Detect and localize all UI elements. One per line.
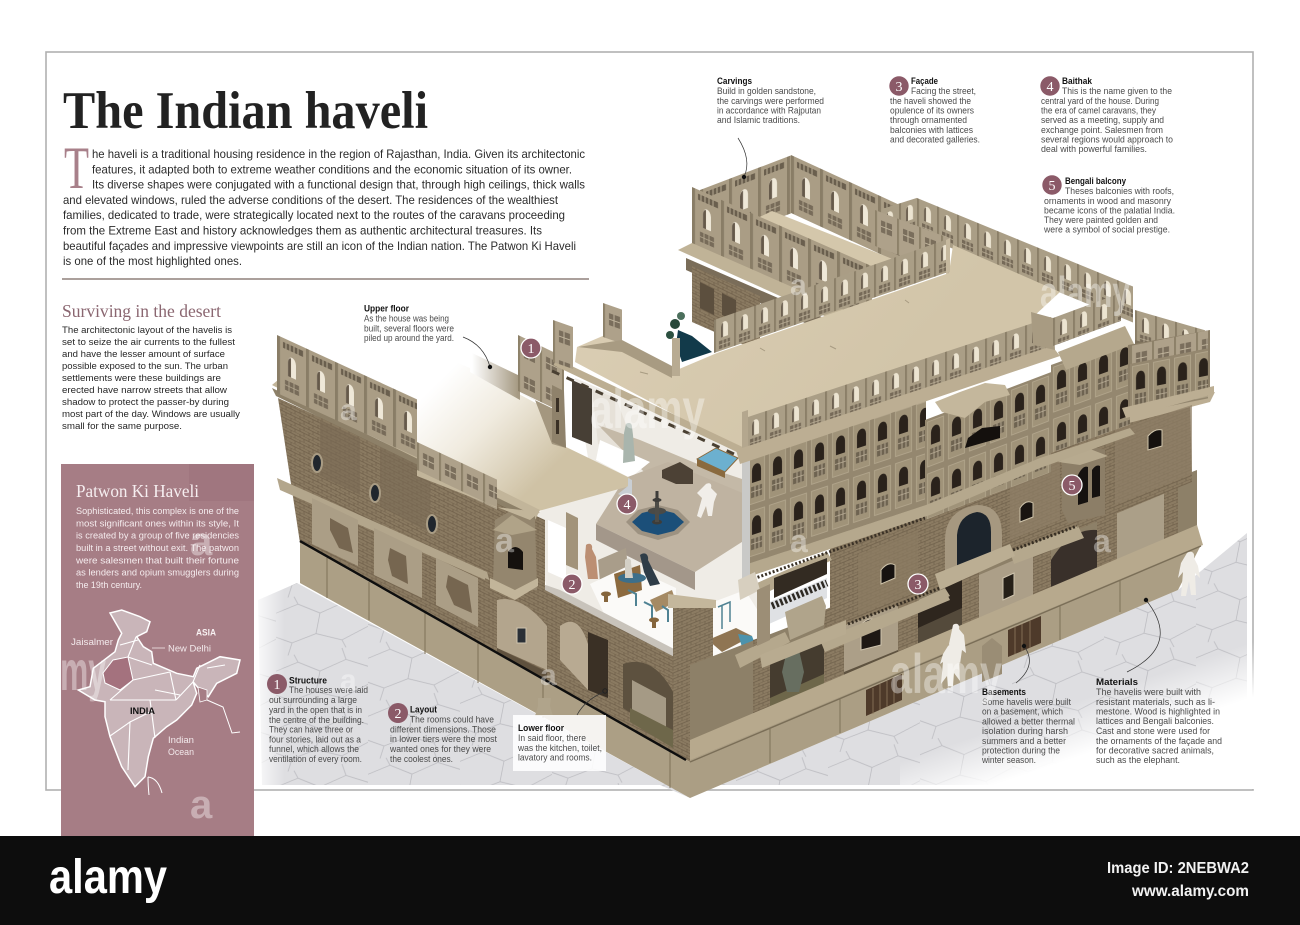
callout: Layout: in lower tiers were the most [390,734,498,744]
lower carved panels [312,498,478,627]
slab under left roof [618,478,632,500]
callout: Façade: the haveli showed the [890,96,971,106]
parapet pier with number 1 [518,335,566,448]
interior: courtyard and rooms [530,378,760,676]
callout: Façade: and decorated galleries. [890,134,980,144]
section: surviving in the desert: settlements were these buildings are [62,373,221,384]
callout: Lower floor [513,689,607,771]
panel text: were salesmen that built their fortune [75,555,239,566]
markers: numbered circles on the building: 3 [914,578,922,593]
watermark overlays: a [190,520,213,564]
callout: Structure: They can have three or [269,724,353,734]
callout: Bengali balcony: ornaments in wood and masonry [1044,196,1172,206]
middle carved storey [735,392,1215,668]
main parapet [745,317,1051,452]
map labels: Jaisalmer [71,637,113,648]
vents [866,674,902,716]
callout: Upper floor: built, several floors were [364,323,454,333]
map of India: ASIA [196,628,216,639]
stock photo footer band: www.alamy.com [1131,883,1249,900]
grand arch [945,505,1002,576]
callout: Structure: yard in the open that is in [269,705,362,715]
callout: Baithak: served as a meeting, supply and [1041,115,1164,125]
callout: Baithak: Baithak [1062,76,1092,86]
main roof [575,245,1060,452]
pavement: cracked ground [252,533,1258,798]
callout: Basements: winter season. [981,755,1036,765]
callout: Structure [267,674,368,764]
title: The Indian haveli [63,82,428,140]
ground storey arches and walls [770,637,824,712]
callout: Bengali balcony: became icons of the palatial India. [1044,206,1175,216]
right room floor [703,590,760,668]
upper left roof [415,345,630,512]
tree and pool [666,312,712,362]
callout: Layout [388,703,498,764]
callout: Upper floor [364,304,492,369]
callout: Bengali balcony [1042,175,1175,234]
callout: Basements [981,644,1075,765]
door canopy [918,588,950,608]
lower arcade [485,578,673,754]
callout: Lower floor: In said floor, there [518,733,586,743]
main right facade [690,470,1197,752]
callout: Basements: on a basement, which [982,706,1063,716]
callout: Carvings [717,76,824,179]
bay window [490,510,538,600]
tower right [1122,330,1214,418]
watermark overlays: alamy [590,377,705,440]
callout: Materials: resistant materials, such as li- [1096,697,1215,707]
callout: Structure: four stories, laid out as a [269,734,361,744]
balcony 5 [1058,445,1108,523]
callout: Lower floor: Lower floor [518,723,565,733]
panel text: built in a street without exit. The patwon [76,543,239,554]
callout: Lower floor: lavatory and rooms. [518,752,592,762]
watermark overlays: a [340,664,357,697]
markers: numbered circles on the building: 5 [1068,479,1076,494]
watermark overlays: a [340,394,357,427]
callout: Layout: Layout [410,704,437,714]
markers: numbered circles on the building: 4 [624,498,630,513]
markers: numbered circles on the building [521,338,1082,594]
stock photo footer band: Image ID: 2NEBWA2 [1107,860,1249,877]
urn and post [982,638,1002,682]
callout: Carvings: and Islamic traditions. [717,115,800,125]
callout: Façade: Facing the street, [911,86,976,96]
callout: Carvings: the carvings were performed [717,96,824,106]
cut face strip [742,452,750,582]
map of India: INDIA [130,706,155,717]
callout: Carvings: in accordance with Rajputan [717,106,821,116]
low parapet fading [470,352,520,400]
terrace pier [757,584,770,646]
callout: Materials: the ornaments of the façade and [1096,736,1222,746]
callout: Façade: opulence of its owners [890,106,975,116]
callout: Materials: for decorative sacred animals, [1096,746,1214,756]
section: surviving in the desert: erected have narrow streets that allow [62,385,227,396]
callout: Façade [889,76,980,144]
callout: Basements: isolation during harsh [982,726,1068,736]
intro text block: families, dedicated to trade, were strategically located next to the routes of the caravans proceeding [63,208,565,222]
callout: Structure: ventilation of every room. [269,754,362,764]
intro text block: from the Extreme East and history acknowledges them as authentic architectural treasures. Its [63,224,542,238]
carved panels right [1010,460,1060,540]
back parapets [875,198,1205,360]
watermark overlays: a [1093,523,1111,559]
intro text block: Its diverse shapes were conjugated with a functional design that, through high ceilings, thick walls [92,178,585,192]
Rajasthan highlight [103,657,133,690]
map of India: Ocean [168,747,194,758]
intro text block: is one of the most highlighted ones. [63,254,242,268]
panel text: most significant ones within its style, It [76,518,239,529]
pier and figure [566,512,578,570]
intro text block: he haveli is a traditional housing residence in the region of Rajasthan, India. Given its architectonic [92,147,585,161]
low parapet [417,442,497,510]
map of India: Indian [168,735,194,746]
callout: Baithak: the era of camel caravans, they [1041,106,1157,116]
fountain [626,491,690,540]
cornice under parapet [736,346,1060,464]
watermark overlays: alamy [890,642,1002,705]
callout: Upper floor: As the house was being [364,314,449,324]
mid cornice [277,478,490,582]
panel heading: Patwon Ki Haveli [76,481,199,501]
callout: Basements: Some havelis were built [982,697,1072,707]
map of India: New Delhi [168,644,211,655]
section: surviving in the desert: shadow to protect the passer-by during [62,397,229,408]
callout: Layout: different dimensions. Those [390,724,496,734]
watermark overlays: a [540,659,557,692]
panel text: the 19th century. [76,580,142,591]
callout: Façade: through ornamented [890,115,967,125]
callout: Façade: balconies with lattices [890,125,974,135]
balustrade of terrace [760,578,827,628]
callout: Bengali balcony: Theses balconies with roofs, [1065,186,1174,196]
callout: Materials: Materials [1096,677,1138,687]
small windows [312,454,437,533]
watermark overlays: a [190,783,213,827]
callout: Bengali balcony: 5 [1048,179,1056,194]
callout: Bengali balcony: Bengali balcony [1065,176,1126,186]
upper storey shading and panels [320,420,430,533]
callout: Baithak: exchange point. Salesmen from [1041,125,1163,135]
watermark overlays: alamy [1040,268,1130,317]
callout: Upper floor: Upper floor [364,304,410,314]
callout: Materials: mestone. Wood is highlighted in [1096,706,1220,716]
foundation left [300,541,690,798]
stub parapets [553,303,680,378]
callout: Layout: 2 [394,707,402,722]
watermark overlays: a [790,523,808,559]
intro text block: beautiful façades and impressive viewpoints are still an icon of the Indian nation. The Patwon Ki Haveli [63,239,576,253]
roof edge beams [555,362,745,452]
foundation right [690,525,1203,798]
bed and dark block [662,462,693,484]
panel text: is created by a group of five residencies [76,531,239,542]
white floor: main room [590,566,676,652]
stock photo footer band: alamy [49,851,167,904]
watermark overlays [60,268,1130,827]
callout: Materials [1096,598,1222,765]
callout: Façade: Façade [911,76,938,86]
callout: Structure: Structure [289,676,327,686]
stub right [1031,312,1055,350]
intro text block [63,135,585,268]
corner piers [673,603,713,742]
callout: Structure: 1 [274,678,280,693]
watermark overlays: my [60,639,106,702]
callout: Structure: funnel, which allows the [269,744,359,754]
drop cap: T [64,135,89,201]
lower storey eaves [757,552,832,596]
section: surviving in the desert: most part of the day. Windows are usually [62,409,240,420]
map of India [71,610,240,795]
callout: Baithak: 4 [1046,80,1054,95]
watermark overlays: a [790,269,807,302]
markers: numbered circles on the building: 2 [568,578,576,593]
callout: Façade: 3 [896,80,902,95]
callout: Lower floor: was the kitchen, toilet, [517,743,602,753]
callout: Basements: allowed a better thermal [982,716,1075,726]
left parapet [277,335,417,457]
stock photo footer band [0,836,1300,925]
panel text: as lenders and opium smugglers during [76,568,239,579]
callout: Structure: out surrounding a large [269,695,357,705]
callout: Structure: the centre of the building. [269,715,364,725]
callout: Carvings: Build in golden sandstone, [717,86,816,96]
callout: Baithak [1040,76,1173,154]
section: surviving in the desert: and have the lesser amount of surface [62,349,225,360]
panel: Patwon Ki Haveli [61,464,254,836]
intro text block: and elevated windows, ruled the adverse conditions of the desert. The residences of the wealthiest [63,193,559,207]
inner parapet [714,240,946,353]
section: surviving in the desert: set to seize the air currents to the fullest [62,337,235,348]
callout: Structure: The houses were laid [289,685,368,695]
statue and white figures [623,423,635,463]
callout: Bengali balcony: were a symbol of social prestige. [1043,224,1170,234]
callout: Basements: summers and a better [982,736,1066,746]
callout: Bengali balcony: They were painted golden and [1044,215,1158,225]
callout: Baithak: central yard of the house. During [1041,96,1159,106]
callout: Baithak: several regions would approach to [1041,134,1173,144]
callout: Layout: wanted ones for they were [389,744,491,754]
bengali roof [935,383,1010,418]
callout: Layout: The rooms could have [410,714,494,724]
callout: Baithak: deal with powerful families. [1041,144,1147,154]
rear block [678,155,906,352]
callout: Materials: lattices and Bengali balconies. [1096,716,1214,726]
callout: Layout: the coolest ones. [390,754,453,764]
left facade [272,380,752,762]
section heading: Surviving in the desert [62,301,221,321]
watermark overlays: a [495,522,515,560]
ground storey base [690,470,1197,752]
callout: Baithak: This is the name given to the [1062,86,1172,96]
callout: Carvings: Carvings [717,76,752,86]
callout: Upper floor: piled up around the yard. [364,333,454,343]
panel text [75,506,239,591]
markers: numbered circles on the building: 1 [528,342,534,357]
illustration: cutaway haveli building [272,155,1215,798]
callout: Materials: The havelis were built with [1096,687,1201,697]
panel text: Sophisticated, this complex is one of the [76,506,239,517]
intro text block: features, it adapted both to extreme weather conditions and the economic situation of its owner. [92,162,572,176]
callout: Materials: Cast and stone were used for [1096,726,1210,736]
callout: Materials: such as the elephant. [1096,755,1180,765]
ground storey piers [753,472,1178,722]
callout: Basements: protection during the [982,746,1060,756]
upper facade [738,337,1135,668]
section: surviving in the desert: possible exposed to the sun. The urban [62,361,228,372]
section: surviving in the desert: The architectonic layout of the havelis is [62,325,232,336]
upper storey bottom cornices [742,428,1135,578]
cornice top [272,380,540,520]
section: surviving in the desert: small for the same purpose. [62,421,182,432]
furniture [601,553,676,628]
section: surviving in the desert [62,301,240,432]
callout: Basements: Basements [982,687,1026,697]
human figures [940,552,1200,686]
